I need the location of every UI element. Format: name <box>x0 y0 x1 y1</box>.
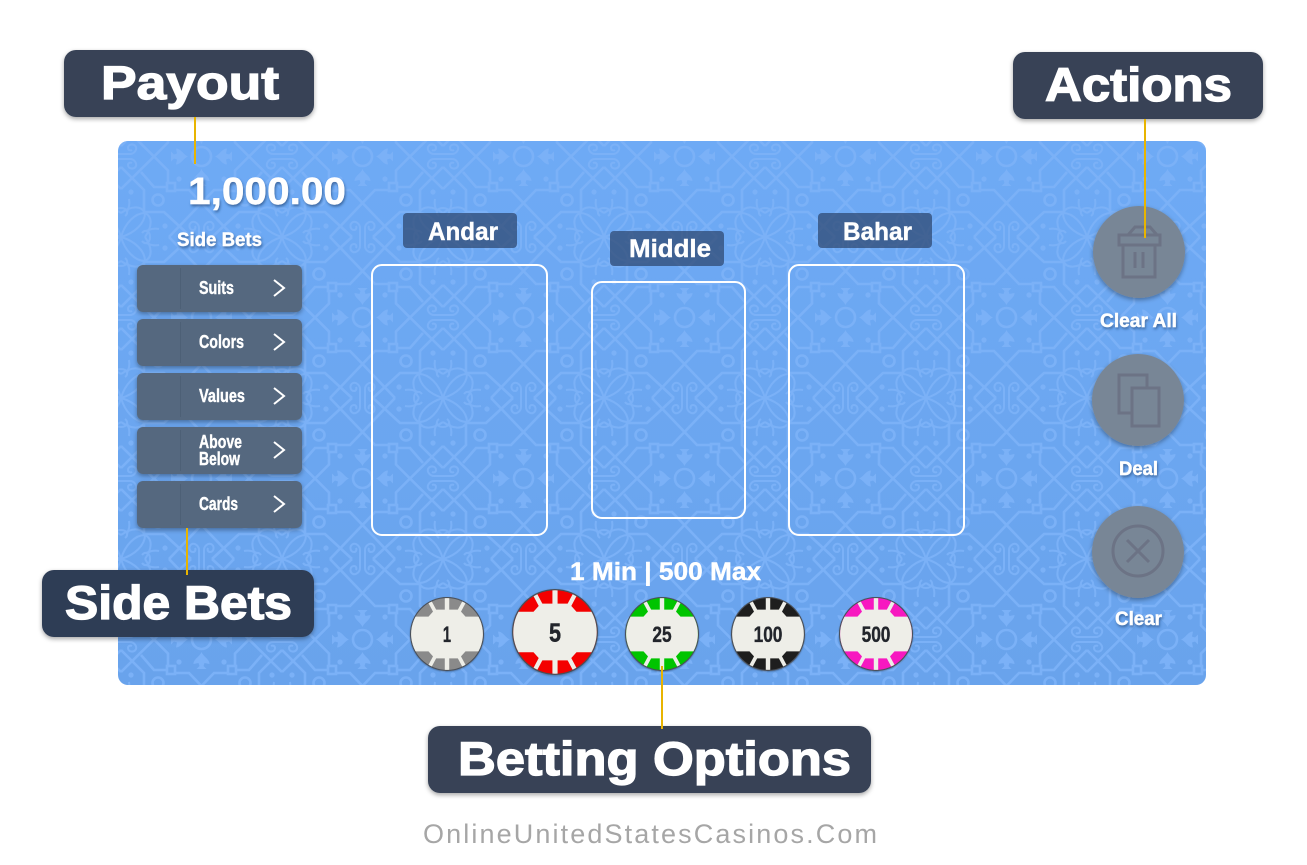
button: Colors <box>137 319 302 366</box>
action button: Deal <box>1092 354 1184 480</box>
action button: Clear: Clear <box>1115 609 1163 630</box>
tag: Bahar: Bahar <box>843 218 912 246</box>
chip: 25: 25 <box>652 622 672 647</box>
icon: trash can <box>1119 227 1160 277</box>
action button: Deal: Deal <box>1119 459 1158 480</box>
panel: game table <box>118 141 1206 685</box>
heading: side bets: Side Bets <box>177 230 262 251</box>
tag: Middle <box>610 231 724 266</box>
label: Payout <box>64 50 314 117</box>
card area: Andar <box>372 265 547 535</box>
button: Above Below <box>137 427 302 474</box>
bet limits: 1 Min | 500 Max <box>570 558 761 586</box>
label: Side Bets: Side Bets <box>65 576 292 629</box>
chip: 500 <box>839 597 913 671</box>
button: Values <box>137 373 302 420</box>
button: Above Below: Above <box>199 432 242 452</box>
button: Values: Values <box>199 386 245 406</box>
button: Colors: Colors <box>199 332 244 352</box>
label: Side Bets <box>42 570 314 637</box>
connector: side bets <box>186 528 188 575</box>
connector: betting options <box>661 666 663 729</box>
tag: Middle: Middle <box>629 235 711 263</box>
chip: 1: 1 <box>443 622 451 647</box>
button: Above Below: Below <box>199 449 241 469</box>
chip: 100: 100 <box>754 622 782 647</box>
footer watermark: OnlineUnitedStatesCasinos.Com <box>423 819 877 849</box>
label: Betting Options: Betting Options <box>458 732 851 785</box>
action button: Clear All <box>1093 206 1185 332</box>
action button: Clear <box>1092 506 1184 630</box>
label: Betting Options <box>428 726 871 793</box>
tag: Andar <box>403 213 517 248</box>
connector: actions <box>1144 119 1146 238</box>
button: Cards: Cards <box>199 494 238 514</box>
tag: Andar: Andar <box>428 218 498 246</box>
side bet buttons <box>137 265 302 528</box>
label: Payout: Payout <box>101 56 279 109</box>
chip: 500: 500 <box>862 622 890 647</box>
button: Cards <box>137 481 302 528</box>
button: Suits <box>137 265 302 312</box>
chip: 25 <box>625 597 699 671</box>
chip: 100 <box>731 597 805 671</box>
chip: 1 <box>410 597 484 671</box>
tag: Bahar <box>818 213 932 248</box>
label: Actions: Actions <box>1045 58 1232 111</box>
card area: Bahar <box>789 265 964 535</box>
button: Suits: Suits <box>199 278 234 298</box>
chip: 5 <box>512 589 598 675</box>
payout value: 1,000.00 <box>188 171 346 213</box>
connector: payout <box>194 117 196 164</box>
icon: cross in circle <box>1113 526 1163 576</box>
icon: cards <box>1119 375 1159 426</box>
chip: 5: 5 <box>549 619 561 647</box>
action button: Clear All: Clear All <box>1100 311 1177 332</box>
card area: Middle <box>592 282 745 518</box>
label: Actions <box>1013 52 1263 119</box>
